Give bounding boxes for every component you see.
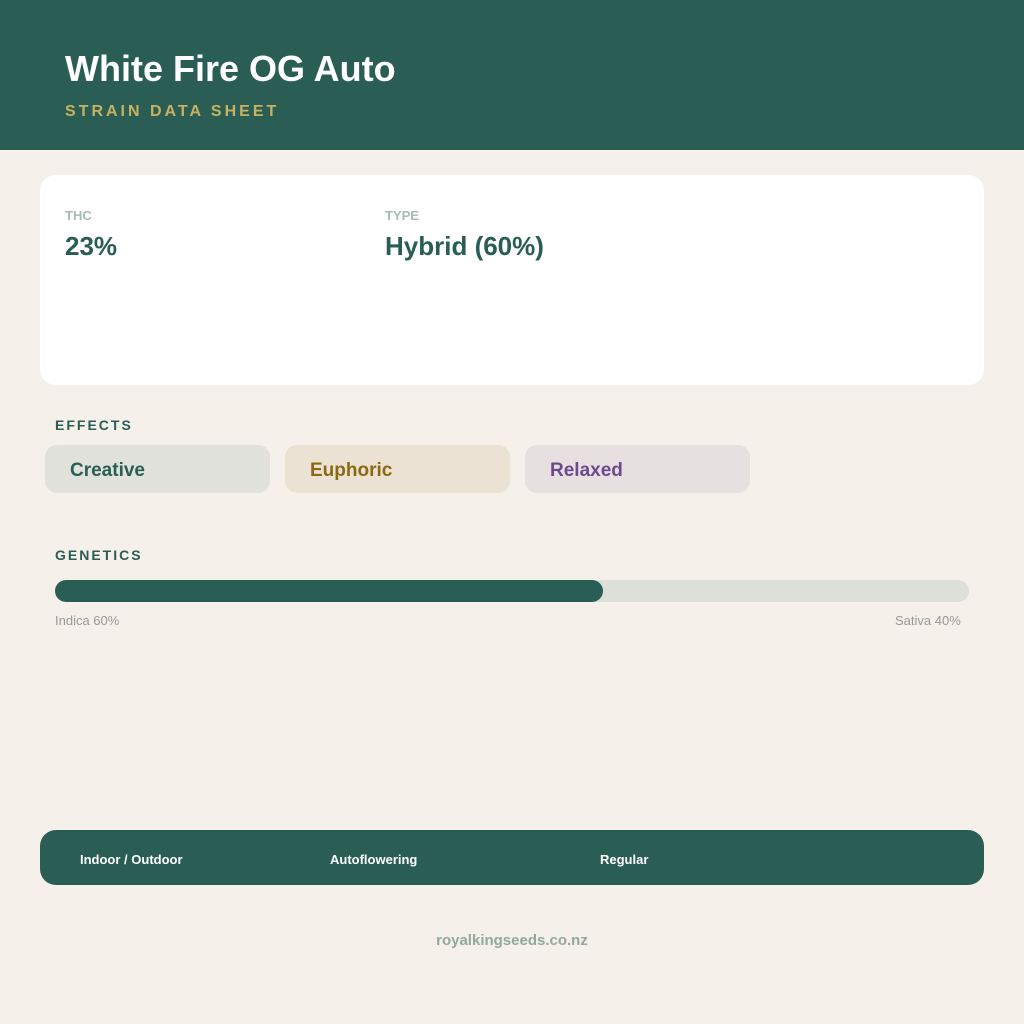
sativa label: Sativa 40% xyxy=(895,613,961,628)
type label: TYPE xyxy=(385,208,419,223)
Relaxed text: Relaxed xyxy=(550,460,623,481)
header band xyxy=(0,0,1024,150)
genetics bar track xyxy=(55,580,969,602)
THC label: THC xyxy=(65,208,92,223)
title: White Fire OG Auto xyxy=(65,48,396,89)
Creative text: Creative xyxy=(70,460,145,481)
THC value: 23% xyxy=(65,231,117,261)
indica label: Indica 60% xyxy=(55,613,119,628)
environment: Indoor / Outdoor xyxy=(80,852,183,867)
flowering type: Autoflowering xyxy=(330,852,417,867)
footer bar xyxy=(40,830,984,885)
subtitle: STRAIN DATA SHEET xyxy=(65,103,279,120)
type value: Hybrid (60%) xyxy=(385,231,544,261)
effect tag: Euphoric xyxy=(285,445,510,493)
genetics bar fill: indica 60% xyxy=(55,580,603,602)
panel: stats card xyxy=(40,175,984,385)
genetics heading: GENETICS xyxy=(55,547,143,563)
effect tag: Relaxed xyxy=(525,445,750,493)
website: royalkingseeds.co.nz xyxy=(436,932,588,949)
effect tag: Creative xyxy=(45,445,270,493)
seed type: Regular xyxy=(600,852,648,867)
effects heading: EFFECTS xyxy=(55,417,133,433)
Euphoric text: Euphoric xyxy=(310,460,392,481)
